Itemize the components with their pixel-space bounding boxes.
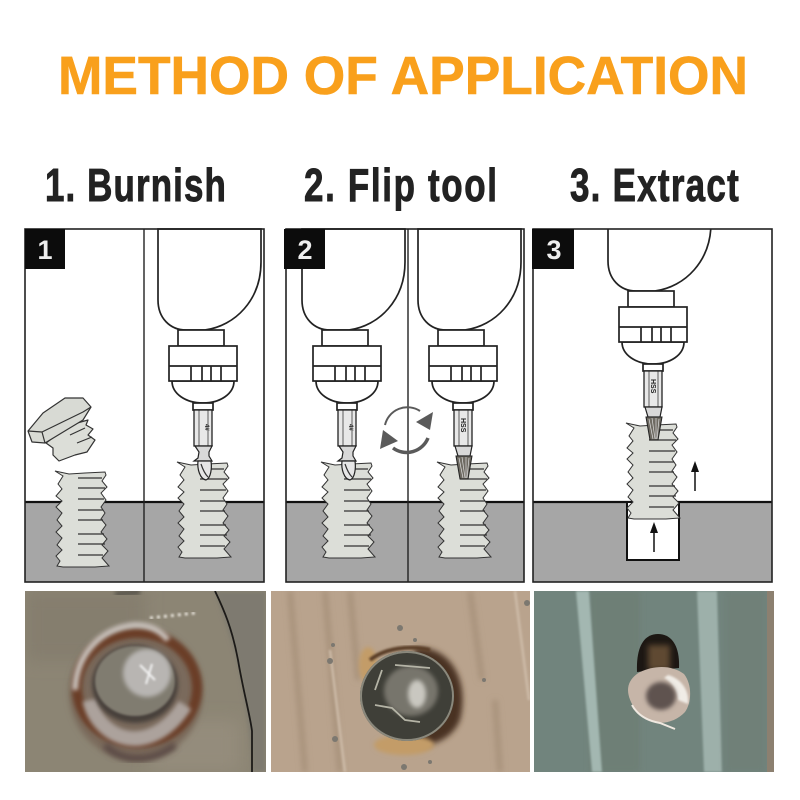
title: METHOD OF APPLICATION: [58, 46, 748, 106]
badge 1: 1: [37, 235, 53, 265]
drill with extractor: HSS: [459, 418, 466, 433]
broken screw in hole: [55, 471, 109, 567]
drill with extractor: [607, 230, 712, 440]
arrow: up beside screw: [691, 461, 699, 491]
heading: step 3: 3. Extract: [570, 159, 739, 211]
drill with drill bit: 4#: [203, 424, 209, 431]
heading: step 2: 2. Flip tool: [304, 159, 497, 211]
drill with extractor: [418, 229, 521, 558]
badge 2: [284, 229, 325, 269]
heading: step 1: 1. Burnish: [45, 159, 226, 211]
photo: stripped screw in wood: [271, 591, 530, 772]
drill with extractor: HSS: [649, 379, 656, 394]
photo: extracted screw on metal panel: [534, 591, 775, 772]
badge 2: 2: [297, 235, 313, 265]
panel: step 2 flip tool diagram: [284, 229, 524, 582]
drill with drill bit: [158, 229, 261, 558]
empty hole: [627, 502, 679, 560]
drill with drill bit: [302, 229, 405, 558]
badge 3: 3: [546, 235, 562, 265]
badge 1: [25, 229, 65, 269]
drill with drill bit: 4#: [347, 424, 353, 431]
arrow: up inside hole: [650, 522, 658, 552]
photo: rusted stripped bolt on stone: [25, 591, 266, 772]
panel: step 1 burnish diagram: [25, 229, 264, 582]
icon: flip arrows: [380, 407, 433, 452]
badge 3: [532, 229, 574, 269]
extracted screw: [626, 423, 680, 519]
panel: step 3 extract diagram: [532, 190, 772, 582]
broken bolt head: [28, 398, 95, 461]
